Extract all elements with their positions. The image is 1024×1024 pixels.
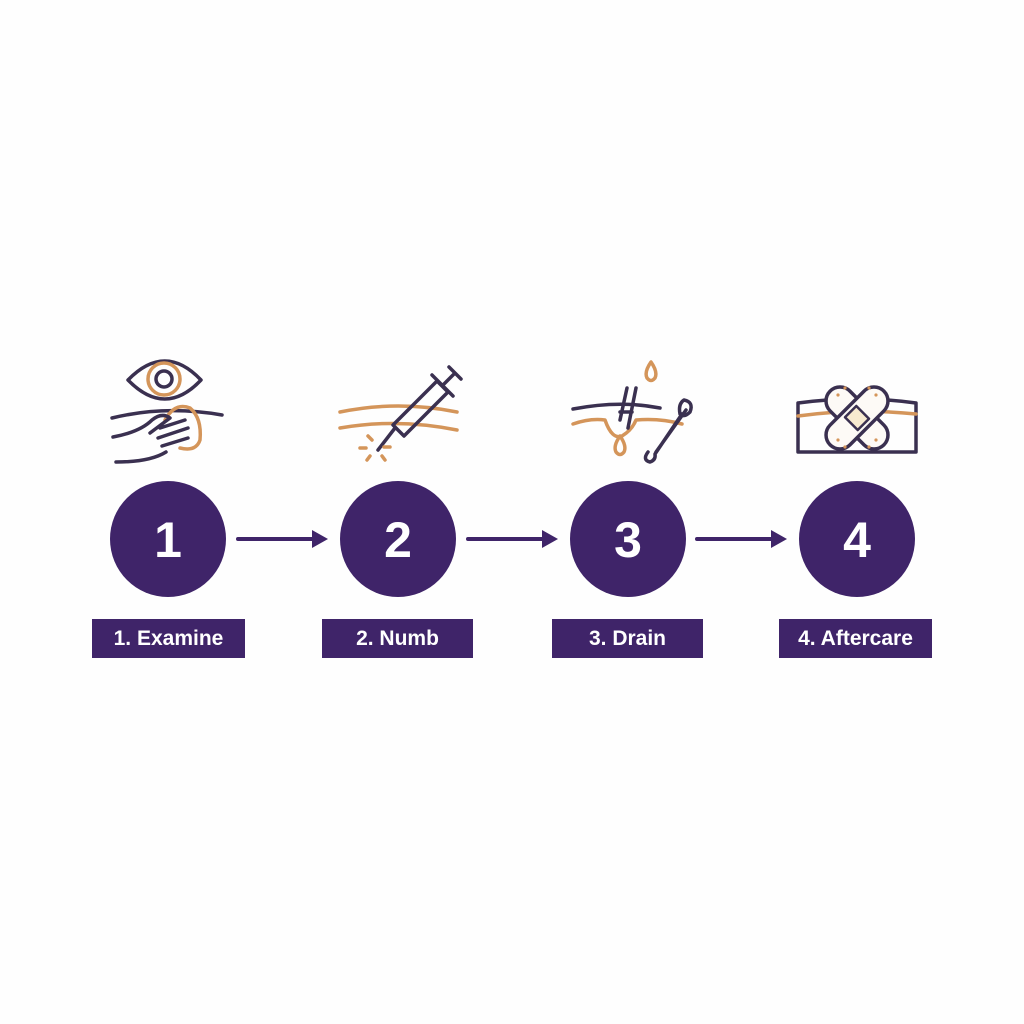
label 3 bbox=[552, 619, 703, 658]
step numbers: 3 bbox=[614, 512, 642, 568]
label 4: 4. Aftercare bbox=[798, 627, 913, 650]
step numbers bbox=[154, 512, 871, 568]
step circles bbox=[110, 481, 915, 597]
step numbers: 1 bbox=[154, 512, 182, 568]
label 1 bbox=[92, 619, 245, 658]
icon: examine eye and hand bbox=[112, 361, 222, 462]
label 2 bbox=[322, 619, 473, 658]
icon: syringe bbox=[340, 367, 461, 460]
label 2: 2. Numb bbox=[356, 627, 439, 650]
icon: drain bbox=[573, 362, 691, 462]
label 1: 1. Examine bbox=[114, 627, 223, 650]
icon: bandage bbox=[798, 381, 916, 455]
label 4 bbox=[779, 619, 932, 658]
label 3: 3. Drain bbox=[589, 627, 666, 650]
arrows bbox=[238, 530, 787, 548]
step numbers: 2 bbox=[384, 512, 412, 568]
step numbers: 4 bbox=[843, 512, 871, 568]
